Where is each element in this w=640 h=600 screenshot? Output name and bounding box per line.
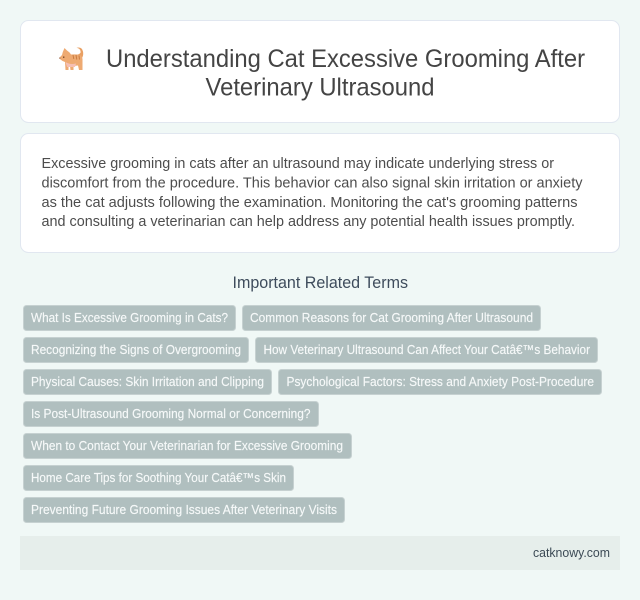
tag: physical causes: Physical Causes: Skin Irritation and Clipping [31,374,264,389]
tag: recognizing the signs: Recognizing the Signs of Overgrooming [31,342,241,357]
tag: preventing future issues: Preventing Future Grooming Issues After Veterinary Visits [31,502,337,517]
tag: home care tips [24,466,294,490]
tag: when to contact [24,434,352,458]
tag: common reasons: Common Reasons for Cat Grooming After Ultrasound [250,310,533,325]
tag: how ultrasound affects behavior: How Veterinary Ultrasound Can Affect Your Catâ€™s Behavior [264,342,591,357]
tag: common reasons [242,306,540,330]
heading: important related terms: Important Related Terms [232,274,408,292]
tag: how ultrasound affects behavior [256,338,598,362]
title text: Veterinary Ultrasound [206,74,434,102]
tag: psychological factors: Psychological Factors: Stress and Anxiety Post-Procedure [286,374,594,389]
tag: what is excessive grooming [24,306,236,330]
tag: recognizing the signs [24,338,248,362]
panel: title card [20,20,620,122]
tag: physical causes [24,370,272,394]
panel: related term tags [24,306,602,522]
tag: preventing future issues [24,498,344,522]
description text [42,155,583,230]
tag: psychological factors [278,370,602,394]
tag: home care tips: Home Care Tips for Soothing Your Catâ€™s Skin [31,470,286,485]
panel: description card [20,134,620,252]
description text: and consulting a veterinarian can help address any potential health issues promptly. [42,213,575,230]
title text [106,45,585,102]
tag: normal or concerning [24,402,318,426]
description text: discomfort from the procedure. This behavior can also signal skin irritation or anxiety [42,174,583,192]
description text: as the cat adjusts following the examination. Monitoring the cat's grooming patterns [42,194,578,211]
tag: what is excessive grooming: What Is Excessive Grooming in Cats? [31,310,228,325]
footer source text: catknowy.com [533,545,610,560]
footer bar [20,536,620,570]
icon: cat [59,48,83,70]
description text: Excessive grooming in cats after an ultrasound may indicate underlying stress or [42,155,554,172]
tag: when to contact: When to Contact Your Veterinarian for Excessive Grooming [31,438,343,453]
tag: normal or concerning: Is Post-Ultrasound Grooming Normal or Concerning? [31,406,310,421]
title text: Understanding Cat Excessive Grooming After [106,45,585,73]
